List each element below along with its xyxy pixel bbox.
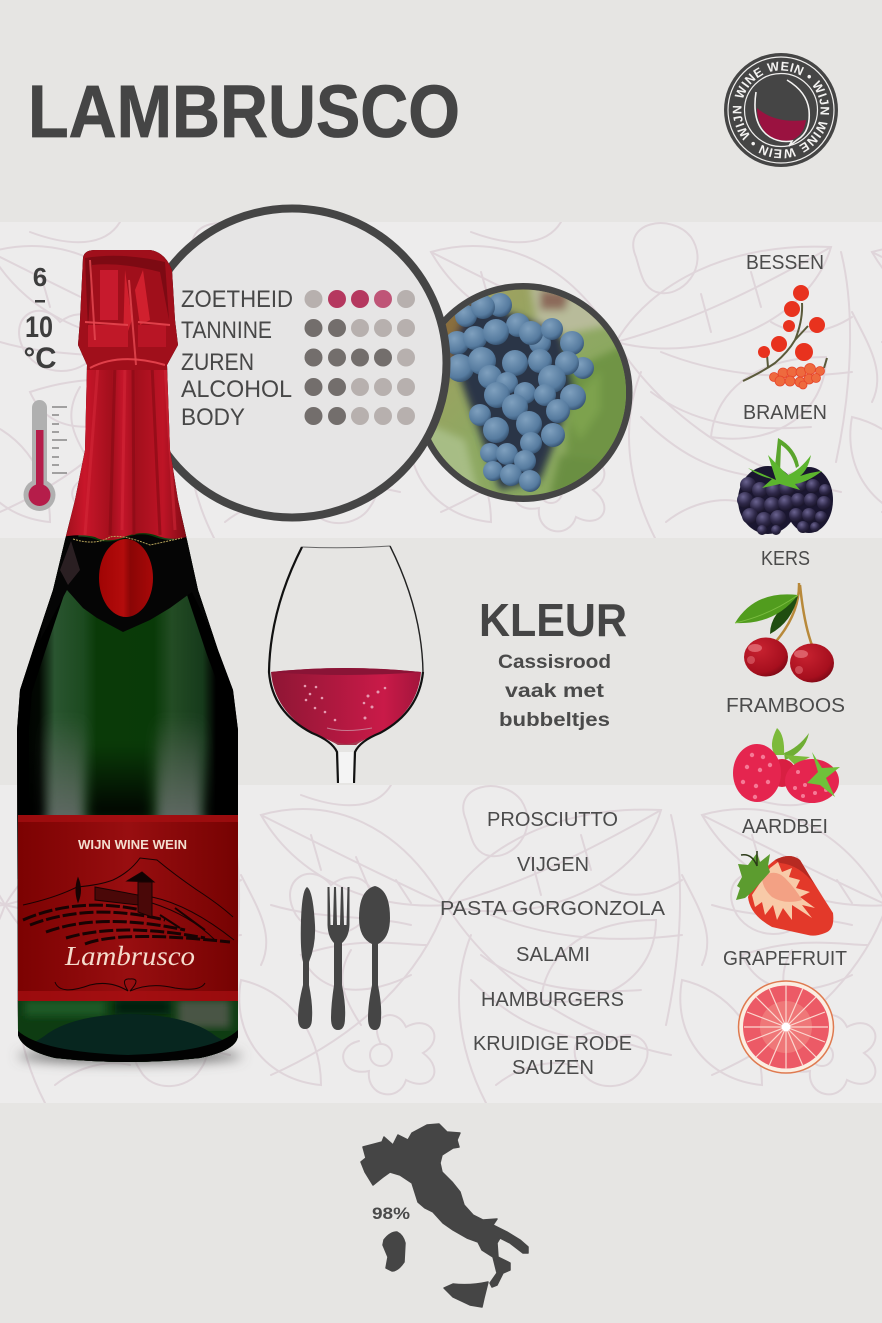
taste labels	[181, 286, 293, 431]
aroma labels	[723, 251, 847, 970]
aroma labels: AARDBEI	[742, 815, 828, 838]
temperature value	[24, 262, 56, 375]
glass stem	[339, 752, 353, 783]
icon: knife	[298, 887, 315, 1029]
bottle collar	[40, 534, 215, 640]
bottle label vineyard	[23, 858, 234, 944]
icon: thermometer	[24, 400, 67, 511]
panel: floral band top	[0, 222, 882, 540]
text: colour description: vaak met	[505, 681, 605, 702]
temperature value: 10	[25, 311, 53, 344]
food pairing list: SALAMI	[516, 944, 590, 966]
food pairing list: VIJGEN	[517, 854, 589, 876]
icon: fork	[328, 887, 350, 1030]
wine glass	[269, 546, 423, 783]
title: LAMBRUSCO	[28, 70, 460, 153]
bottle label ornament	[55, 979, 205, 991]
text: colour description	[498, 652, 611, 731]
bottle seal	[99, 539, 153, 617]
taste dots: tannine	[304, 319, 415, 337]
aroma labels: FRAMBOOS	[726, 694, 845, 717]
text: percentage: 98%	[372, 1204, 410, 1223]
icon: blackberries	[737, 438, 833, 535]
map: Italy	[361, 1124, 528, 1307]
taste labels: ZOETHEID	[181, 286, 293, 313]
heading: kleur: KLEUR	[479, 594, 627, 646]
temperature	[24, 262, 67, 511]
aroma labels: BESSEN	[746, 251, 824, 274]
taste labels: TANNINE	[181, 317, 272, 344]
food pairing list: HAMBURGERS	[481, 989, 624, 1011]
food pairing list: PASTA GORGONZOLA	[440, 898, 666, 920]
bottle base	[18, 1000, 238, 1062]
bottle label heading: WIJN WINE WEIN	[78, 838, 187, 852]
wine	[271, 668, 421, 745]
taste dots: zoetheid	[304, 290, 415, 308]
panel: floral band bottom	[0, 785, 882, 1103]
glass outline	[269, 546, 423, 783]
taste labels: ALCOHOL	[181, 376, 292, 403]
taste labels: ZUREN	[181, 349, 254, 376]
bottle label	[18, 815, 238, 1001]
logo ring text: WINE WEIN • WIJN WINE WEIN • WIJN	[732, 62, 830, 158]
aroma labels: BRAMEN	[743, 401, 827, 424]
food pairing list: PROSCIUTTO	[487, 809, 618, 831]
bottle capsule	[78, 250, 178, 370]
taste dots: zuren	[304, 348, 415, 366]
panel: taste profile circle	[138, 208, 446, 518]
taste dots: alcohol	[304, 378, 415, 396]
aroma labels: KERS	[761, 547, 810, 570]
taste dots: body	[304, 407, 415, 425]
aroma labels: GRAPEFRUIT	[723, 947, 847, 970]
bottle	[15, 245, 240, 1080]
text: colour description: Cassisrood	[498, 652, 611, 673]
icon: strawberry	[736, 851, 833, 936]
icon: spoon	[359, 886, 390, 1030]
temperature value: °C	[24, 342, 56, 375]
icon: grapefruit	[738, 981, 834, 1073]
grape photo	[414, 283, 635, 502]
icon: cutlery	[298, 886, 390, 1030]
food pairing list: SAUZEN	[512, 1057, 594, 1079]
icon: raspberries	[733, 728, 840, 803]
bottle shadow	[18, 1049, 242, 1063]
logo badge	[724, 53, 838, 167]
temperature value: 6	[33, 262, 47, 292]
icon: red berries	[743, 285, 827, 389]
icon: cherries	[735, 583, 834, 682]
taste labels: BODY	[181, 404, 245, 431]
text: colour description: bubbeltjes	[499, 710, 610, 731]
bottle label script: Lambrusco	[64, 941, 195, 971]
food pairing list: KRUIDIGE RODE	[473, 1033, 632, 1055]
bottle foil	[66, 362, 186, 540]
logo glass	[755, 80, 809, 146]
food pairing list	[440, 809, 666, 1079]
